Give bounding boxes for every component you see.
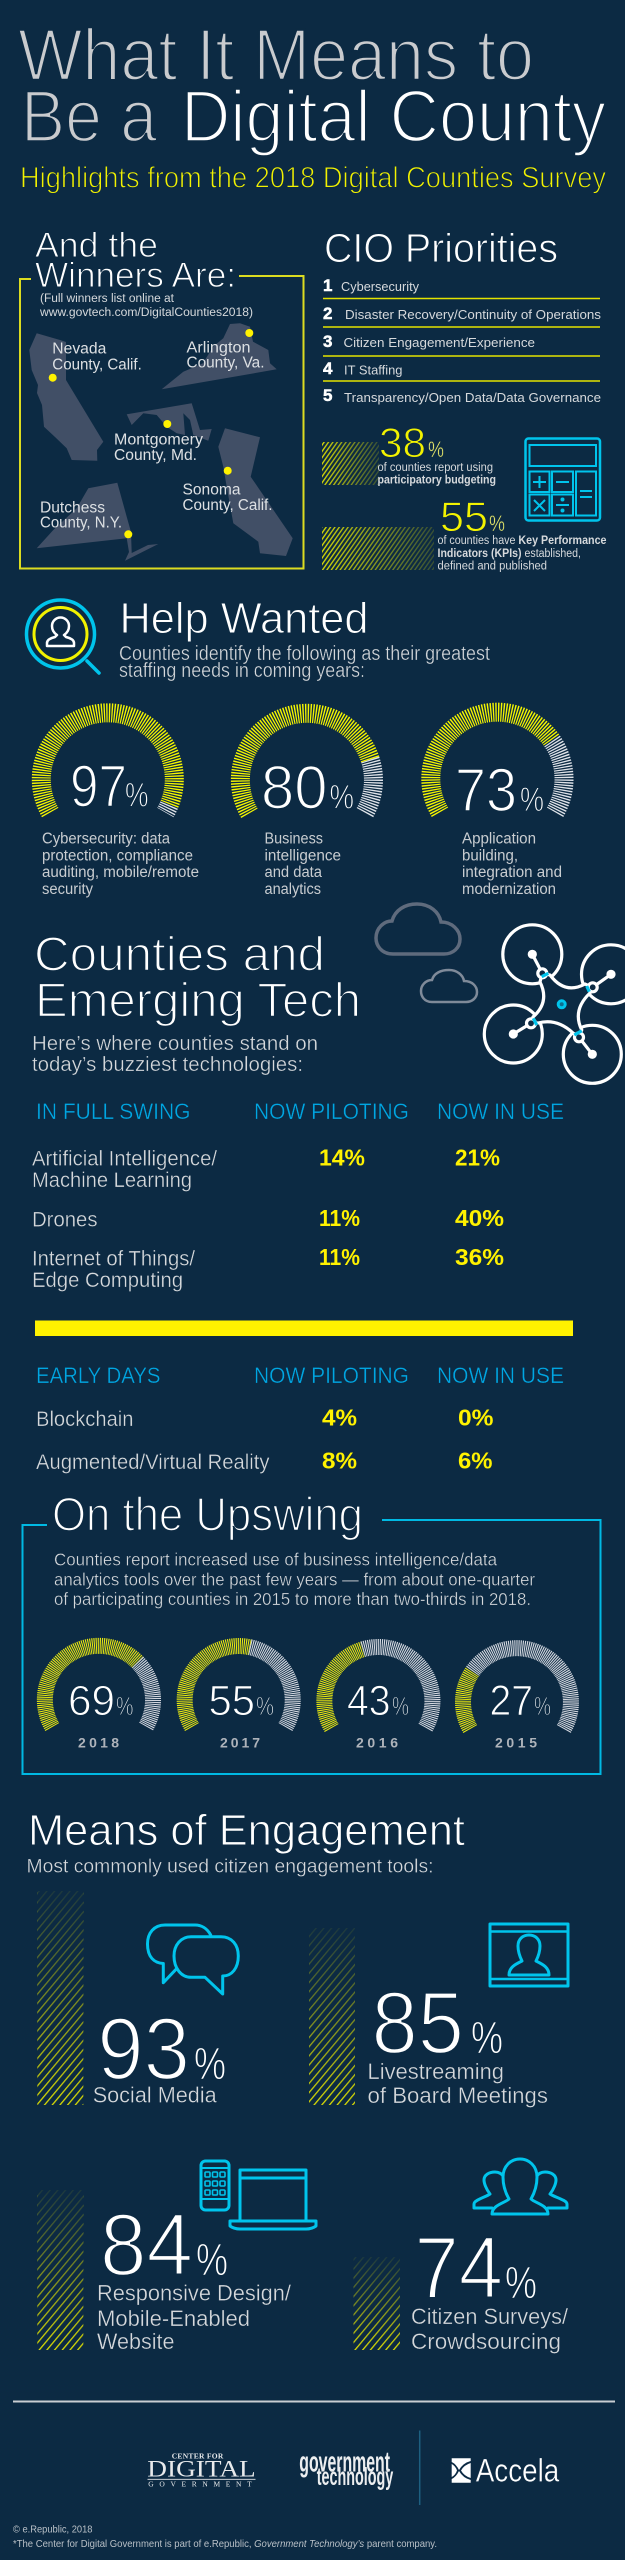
priority list: Citizen Engagement/Experience [344,335,535,350]
stat: social media [37,1891,226,2108]
panel: winners [20,226,304,568]
stat: responsive design: Mobile-Enabled [97,2306,250,2331]
footer credits: © e.Republic, 2018 [13,2524,93,2536]
gauge: 2017: % [256,1691,274,1721]
intro text: Here’s where counties stand on [32,1033,318,1055]
heading: Help Wanted [120,594,368,643]
county labels: Sonoma [182,481,241,498]
gauge: 2015: % [534,1691,551,1721]
logo: Government Technology [299,2447,393,2491]
gauge: 2016: 2016 [356,1734,398,1750]
gauge: 2018: 2018 [78,1734,119,1750]
table: early days: NOW IN USE [437,1363,564,1388]
gauge: 2015: 27 [490,1677,533,1725]
icon: magnifying glass with person [26,600,99,673]
county labels [40,339,272,531]
icon: three people [474,2159,567,2214]
heading: On the Upswing [52,1488,363,1540]
county labels: County, Va. [186,355,264,372]
panel: on the upswing [22,1488,600,1774]
map: California (Nevada County) [29,333,103,461]
icon: chat bubbles [148,1925,238,1994]
panel: CIO priorities [322,225,606,572]
note [39,293,253,319]
priority list: Cybersecurity [341,279,420,294]
stat: 55%: of counties have Key Performance [438,535,606,547]
stat: citizen surveys [354,2218,569,2354]
title [18,15,606,158]
stat: responsive design: % [196,2234,228,2285]
gauge: 2016: % [392,1691,409,1721]
gauge: 80%: Business [264,830,323,848]
table: in full swing: 11% [319,1205,360,1231]
stat: 38%: 38 [379,419,426,466]
table: in full swing: Drones [32,1208,98,1232]
table: in full swing: 11% [319,1244,360,1270]
priority list: 4 [323,359,333,378]
stat: 55%: defined and published [438,560,547,572]
gauge: 2016: 43 [347,1677,390,1725]
stat: 55% [322,493,606,572]
map: California (Sonoma County) [218,428,293,556]
stat: 38%: % [428,437,444,462]
gauge: 80%: intelligence [264,848,341,864]
gauge: 2017: 2017 [220,1734,260,1750]
logo: Center for Digital Government: CENTER FOR [172,2451,224,2460]
gauge: 80%: 80 [261,754,328,822]
table: early days: 8% [322,1448,357,1474]
stat: responsive design: Website [97,2329,174,2354]
stat: 55%: % [489,511,505,536]
table: in full swing: NOW IN USE [437,1099,564,1124]
stat: citizen surveys: % [505,2257,537,2308]
heading: Emerging Tech [35,974,361,1028]
panel: counties and emerging tech [32,928,573,1474]
table: in full swing [32,1099,564,1292]
priority list: 5 [323,386,332,405]
gauge: 2017: 55 [208,1677,255,1725]
stat: responsive design: 84 [100,2195,193,2294]
county labels: County, Calif. [182,497,272,514]
intro text [54,1550,535,1609]
gauge: 73%: integration and [462,864,562,881]
footer credits [13,2524,437,2550]
priority list: 1 [323,276,332,295]
gauge: 2018 [45,1646,153,1750]
title: What It Means to [18,15,534,96]
gauge: 73%: modernization [462,881,556,898]
gauge: 2015 [463,1648,571,1750]
gauge: 73%: building, [462,848,518,864]
county labels: Arlington [186,339,250,356]
gauge: 97% [41,713,199,898]
panel: help wanted [41,594,564,898]
note: (Full winners list online at [40,293,175,305]
gauge: 73%: 73 [455,756,517,824]
heading [35,226,236,295]
footer credits: *The Center for Digital Government is part of e.Republic, Government Technology’s parent company. [13,2538,437,2550]
heading: CIO Priorities [324,225,558,271]
gauge: 97%: Cybersecurity: data [42,830,170,848]
gauge: 2018: 69 [68,1677,115,1725]
stat: 55%: Indicators (KPIs) established, [438,548,581,560]
stat: responsive design: Responsive Design/ [97,2280,292,2306]
table: in full swing: 14% [319,1144,365,1170]
gauge: 2016 [324,1647,432,1750]
stat: 38%: participatory budgeting [378,474,496,486]
gauge: 2015: 2015 [495,1734,537,1750]
intro text: analytics tools over the past few years — from about one-quarter [54,1570,535,1590]
table: early days: Augmented/Virtual Reality [36,1451,270,1474]
stat: livestreaming: 85 [372,1973,464,2072]
map: Maryland [127,403,212,441]
intro text: Most commonly used citizen engagement tools: [26,1856,433,1878]
logo: Center for Digital Government: DIGITAL [147,2457,256,2482]
gauge: 2017 [185,1646,293,1750]
table: early days: 6% [458,1448,492,1474]
table: in full swing: NOW PILOTING [254,1099,409,1124]
stat: livestreaming: % [471,2012,503,2063]
yellow frame [20,276,304,568]
intro text [32,1033,318,1076]
icon: drone [484,925,625,1083]
priority list: IT Staffing [344,362,402,378]
stat: livestreaming [309,1928,548,2108]
stat: social media: 93 [97,1999,190,2098]
gauge: 2018: % [116,1691,134,1721]
table: early days [36,1363,564,1474]
icon: phone and laptop [201,2161,316,2229]
stat: citizen surveys: Crowdsourcing [411,2329,561,2354]
table: in full swing: 40% [455,1205,504,1231]
table: in full swing: Internet of Things/ [32,1248,195,1270]
map: Virginia [162,323,277,389]
stat: 55%: 55 [440,493,488,540]
logo: Accela: Accela [476,2453,559,2489]
intro text: Counties report increased use of business intelligence/data [54,1550,497,1570]
county labels: Nevada [52,340,107,357]
title: Digital County [181,76,606,158]
table: early days: 0% [458,1404,494,1430]
intro text: today’s buzziest technologies: [32,1054,303,1076]
gauge: 97%: % [125,776,148,814]
yellow divider bar [35,1320,573,1336]
gauge: 80% [240,713,373,898]
logo: Accela [452,2453,559,2489]
table: early days: Blockchain [36,1408,134,1431]
logo: Center for Digital Government: GOVERNMENT [148,2480,252,2489]
logo: Government Technology: government [299,2447,390,2479]
intro text: of participating counties in 2015 to more than two-thirds in 2018. [54,1589,531,1609]
gauge: 97%: 97 [70,754,127,820]
icon: video screen with person [490,1924,568,1986]
table: in full swing: Machine Learning [32,1169,192,1192]
gauge: 80%: analytics [264,881,321,898]
title: Be a [21,76,157,158]
table: in full swing: Edge Computing [32,1269,183,1292]
stat: livestreaming: of Board Meetings [368,2083,548,2108]
county dots [49,329,253,538]
gauge: 80%: and data [264,864,322,881]
stat: 38%: of counties report using [378,462,493,474]
gauge: 97%: protection, compliance [42,848,193,864]
stat: 38% [322,419,496,486]
county labels: County, N.Y. [40,514,122,531]
note: www.govtech.com/DigitalCounties2018) [39,307,253,319]
table: in full swing: 21% [455,1144,500,1170]
heading: And the [35,226,158,265]
table: early days: 4% [322,1404,357,1430]
county labels: County, Md. [114,447,197,464]
icon: large cloud [376,904,460,954]
gauge: 97%: auditing, mobile/remote [42,864,199,881]
heading: Winners Are: [35,256,236,295]
gauge: 73%: % [520,781,544,819]
heading [34,928,361,1028]
logo: Government Technology: technology [317,2463,393,2491]
intro text [119,643,490,682]
table: early days: EARLY DAYS [36,1363,160,1388]
priority list: Disaster Recovery/Continuity of Operations [345,307,601,322]
stat: citizen surveys: 74 [414,2218,503,2317]
priority list [323,276,601,405]
logo: Center for Digital Government [147,2451,256,2489]
table: in full swing: 36% [455,1244,504,1270]
gauge: 73%: Application [462,830,536,848]
stat: social media: % [194,2038,226,2089]
table: in full swing: IN FULL SWING [36,1099,190,1124]
gauge: 80%: % [330,778,354,816]
stat: citizen surveys: Citizen Surveys/ [411,2304,569,2329]
county labels: Montgomery [114,431,203,448]
priority list: 3 [323,332,332,351]
heading: Means of Engagement [28,1806,465,1855]
panel: means of engagement [26,1806,569,2354]
table: early days: NOW PILOTING [254,1363,409,1388]
stat: livestreaming: Livestreaming [368,2059,504,2084]
map: New York [37,483,158,561]
stat: social media: Social Media [93,2083,217,2108]
stat: responsive design [37,2190,292,2354]
intro text: staffing needs in coming years: [119,660,365,682]
gauge: 73% [431,712,564,898]
icon: calculator [526,438,600,520]
heading: Counties and [34,928,325,982]
gauge: 97%: security [42,881,93,898]
county labels: Dutchess [40,499,105,516]
intro text: Counties identify the following as their greatest [119,643,490,665]
priority list: Transparency/Open Data/Data Governance [344,390,601,405]
table: in full swing: Artificial Intelligence/ [32,1148,217,1170]
county labels: County, Calif. [52,356,142,373]
priority list: 2 [323,304,332,323]
icon: small cloud [421,970,477,1002]
cyan frame [22,1520,600,1774]
